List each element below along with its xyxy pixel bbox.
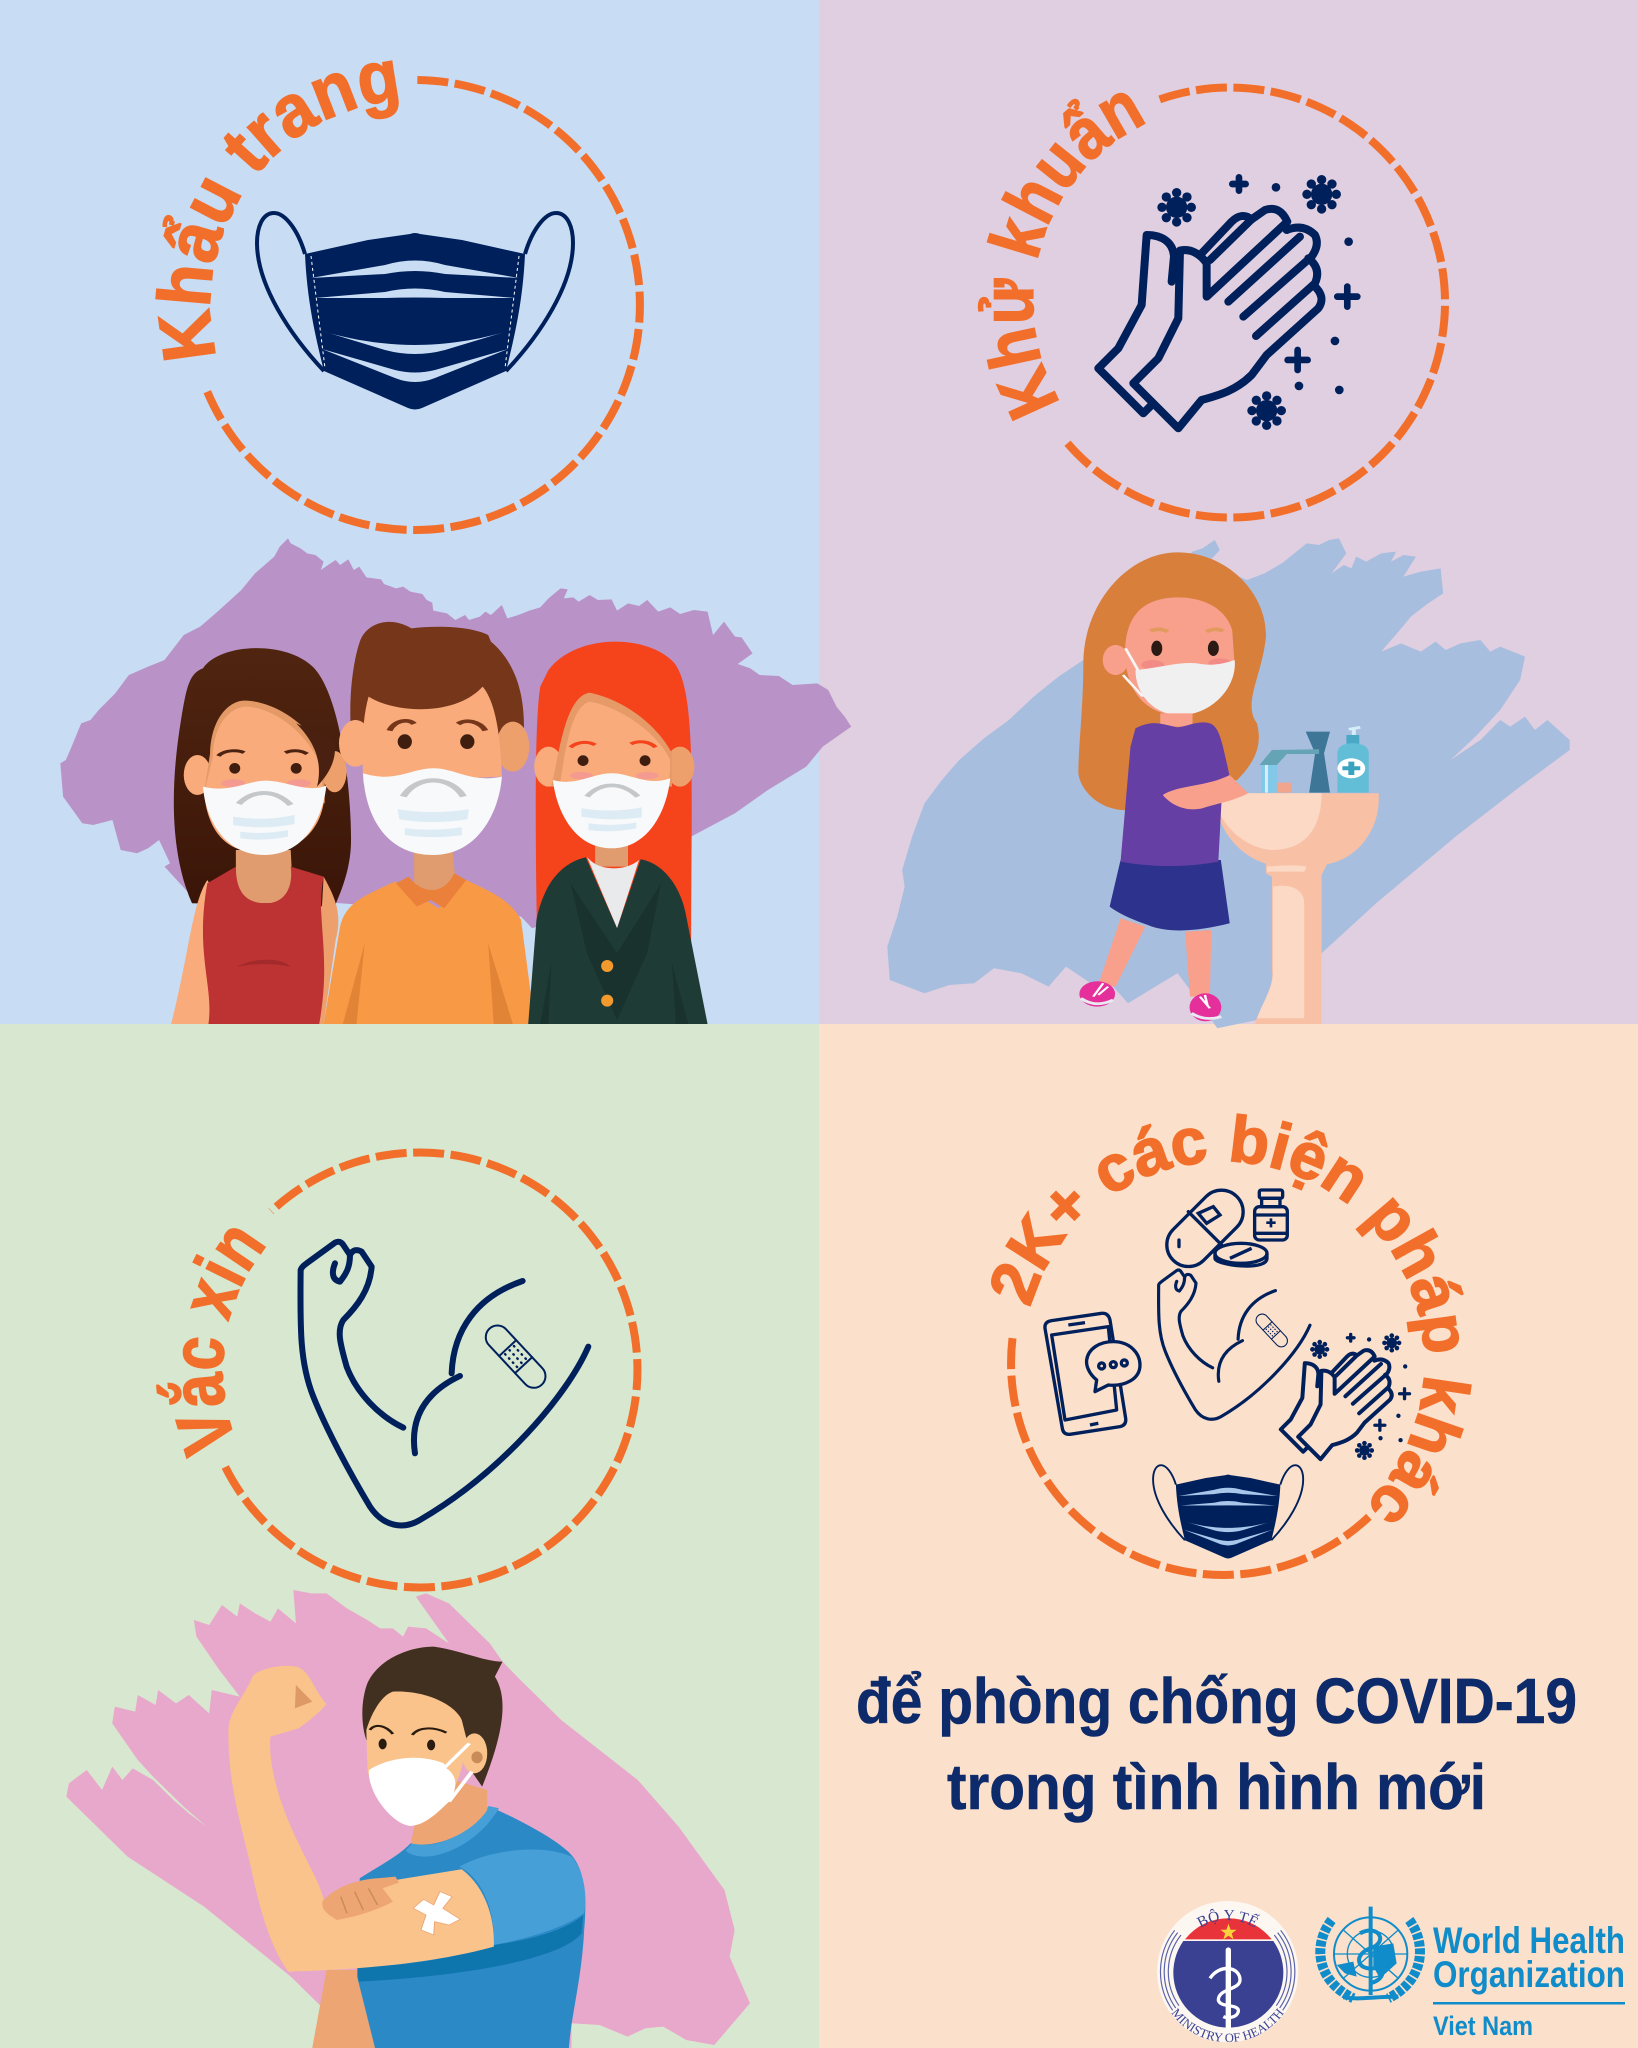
blue brush stroke (887, 538, 1570, 1028)
person: man with brown hair (324, 622, 535, 1024)
icon group: measures (1045, 1181, 1410, 1460)
dashed circle: 2K+ (1011, 1338, 1371, 1575)
logo: Ministry of Health: BỘ Y TẾ (1196, 1908, 1260, 1928)
icon: small face mask (1153, 1465, 1303, 1559)
illustration: man showing vaccinated arm (66, 1590, 750, 2048)
WHO emblem (1320, 1907, 1420, 1998)
person: woman with red hair (528, 642, 708, 1024)
main message (856, 1665, 1577, 1823)
illustration: three people wearing masks (60, 538, 851, 1024)
man (228, 1647, 585, 2048)
icon: vaccinated arm (300, 1242, 588, 1525)
logo: Ministry of Health (1157, 1901, 1298, 2042)
icon: face mask (257, 213, 573, 410)
faucet and water (1260, 732, 1330, 793)
heading: Khử khuẩn: Khử khuẩn (978, 92, 1146, 422)
main message: trong tình hình mới (947, 1751, 1486, 1823)
soap bottle (1337, 727, 1369, 793)
panel: vaccine background (0, 1024, 819, 2048)
icon: capsule (1158, 1181, 1252, 1275)
icon: medicine bottle (1255, 1190, 1287, 1240)
heading: Khẩu trang: Khẩu trang (155, 60, 399, 360)
icon: washing hands (1098, 175, 1357, 430)
icon: small vaccinated arm (1159, 1270, 1310, 1419)
person: woman with brown hair (171, 648, 351, 1024)
logo: Ministry of Health: MINISTRY OF HEALTH (1171, 2008, 1284, 2042)
pink brush stroke (66, 1590, 750, 2048)
sink (1215, 793, 1379, 1024)
icon: tablet (1215, 1243, 1267, 1266)
illustration: girl washing hands at a sink (887, 538, 1570, 1028)
dashed circle: vaccine (225, 1152, 637, 1587)
heading: Vắc xin: Vắc xin (156, 1228, 266, 1460)
heading: 2K+ các biện pháp khác: 2K+ các biện pháp khác (991, 1113, 1472, 1522)
icon: phone with speech bubble (1045, 1313, 1140, 1434)
logo: World Health Organization: Viet Nam (1433, 2011, 1533, 2041)
dashed circle: masks (207, 80, 640, 530)
girl (1078, 552, 1266, 1021)
panel: masks background (0, 0, 819, 1024)
logo: World Health Organization (1320, 1907, 1625, 2041)
panel: disinfection background (819, 0, 1638, 1024)
panel: 2K+ background (819, 1024, 1638, 2048)
purple brush stroke (60, 538, 851, 928)
icon: small washing hands (1281, 1333, 1410, 1460)
dashed circle: disinfection (1068, 88, 1445, 518)
